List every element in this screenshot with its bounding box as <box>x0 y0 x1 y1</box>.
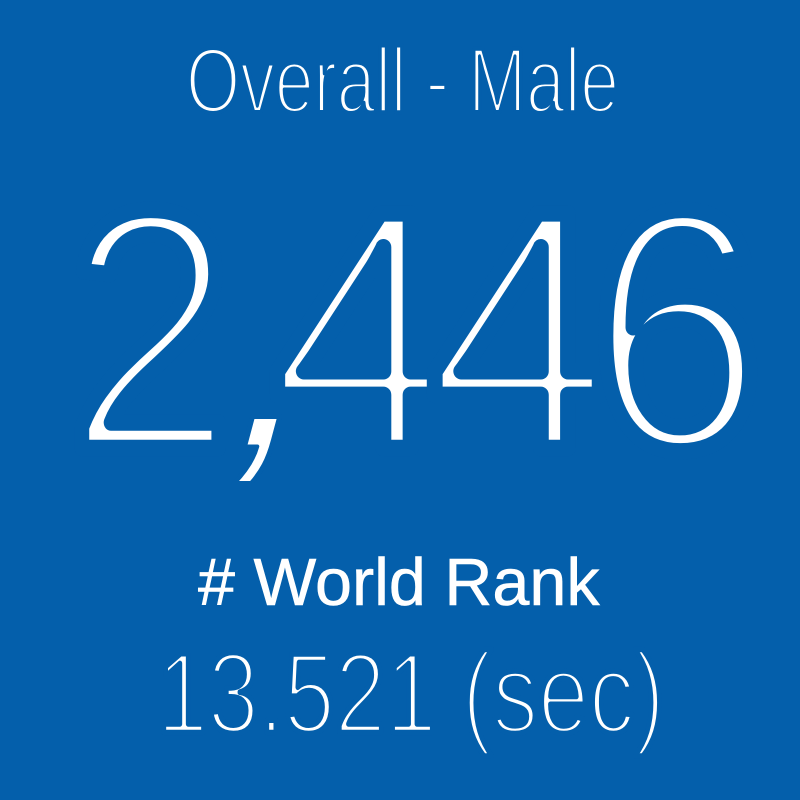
big number: 2,446: , <box>202 190 366 508</box>
big number: 2,446: 44 <box>270 139 609 520</box>
label: # World Rank: # World Rank <box>198 546 600 620</box>
heading: Overall - Male: Overall - Male <box>186 30 619 132</box>
big number: 2,446: 2 <box>67 140 234 521</box>
value: 13.521 (sec): 13.521 (sec) <box>157 630 665 758</box>
big number: 2,446: 6 <box>590 140 763 521</box>
big number: 2,446 <box>67 139 763 521</box>
